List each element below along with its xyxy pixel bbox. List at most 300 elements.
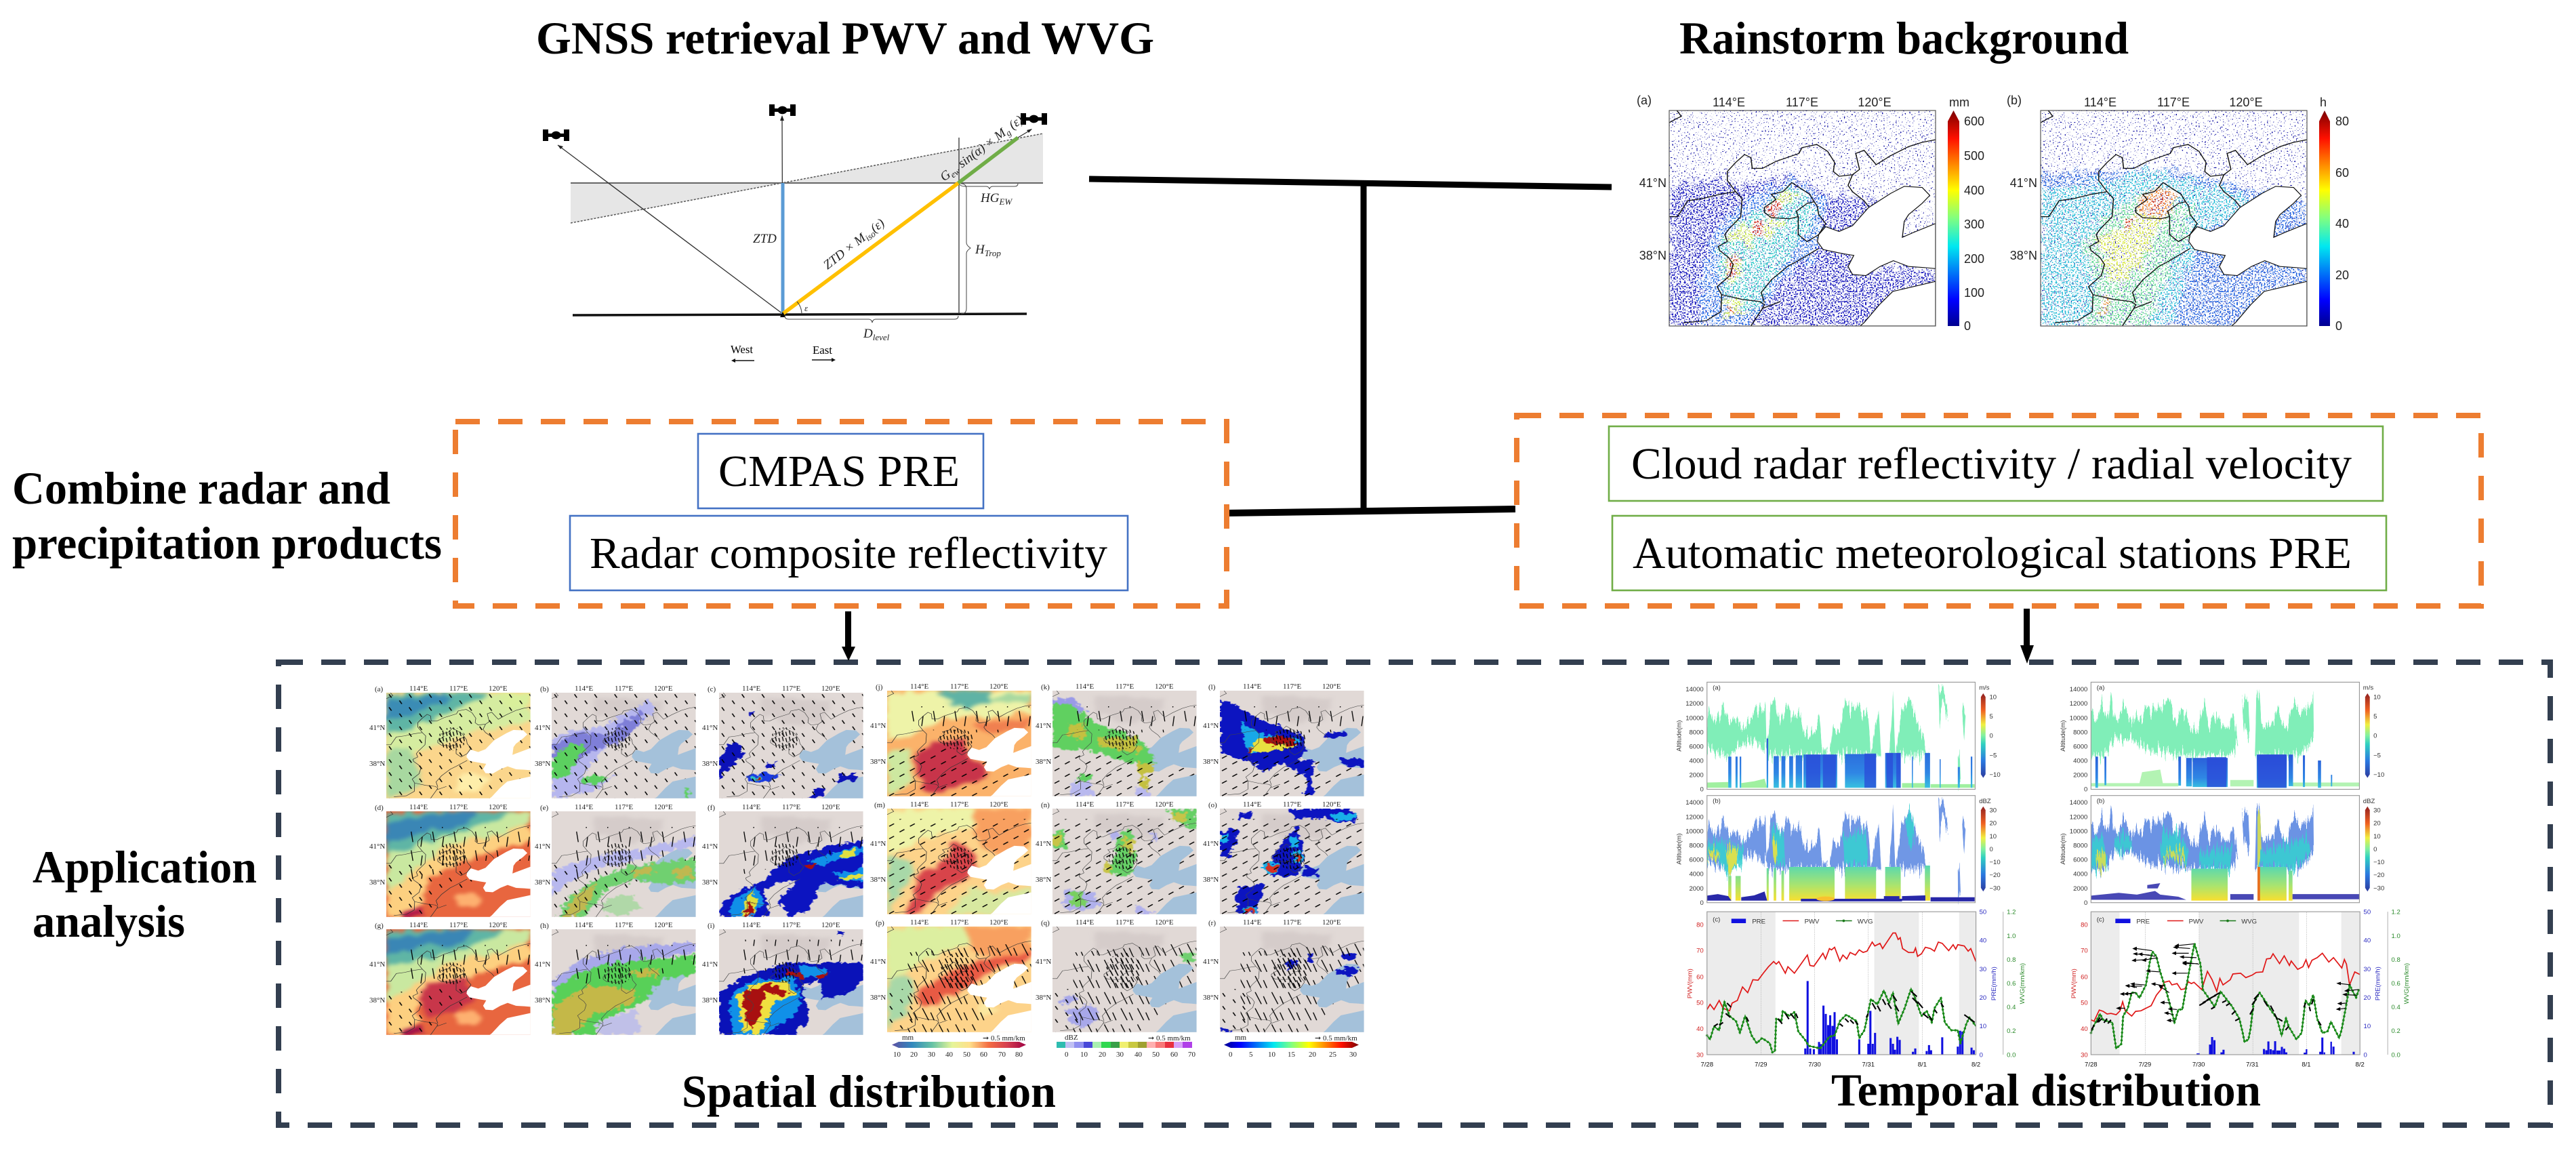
axis labels: 120°E <box>2229 96 2263 109</box>
axes labels: 50 <box>1696 1000 1704 1007</box>
axes labels: 40 <box>1980 937 1986 945</box>
legend: PWV <box>2189 918 2204 925</box>
radial velocity panel a: (a) <box>1713 685 1721 692</box>
panel: cloud radar and station products <box>1517 415 2481 606</box>
axes labels: 30 <box>1980 966 1986 973</box>
axes labels: 0.4 <box>2007 1004 2016 1011</box>
map panel j: 41°N <box>870 722 886 730</box>
map panel n <box>1036 800 1197 914</box>
colorbar: PWV mm <box>892 1034 1026 1059</box>
map panel o <box>1203 800 1364 914</box>
axes labels: 7/31 <box>1862 1061 1875 1069</box>
map panel f: 114°E <box>742 803 760 811</box>
box: CMPAS PRE <box>698 434 983 508</box>
reflectivity panel b: (b) <box>2097 797 2104 805</box>
map panel b: 38°N <box>535 760 550 768</box>
reflectivity panel b: −10 <box>1989 859 2001 866</box>
map panel l: 38°N <box>1203 758 1219 766</box>
axes labels <box>2070 909 2411 1069</box>
reflectivity panel b: 0 <box>2373 846 2377 853</box>
axes labels: 40 <box>1696 1026 1704 1033</box>
axes labels: 1.0 <box>2007 933 2016 940</box>
axes labels: 8/1 <box>1918 1061 1927 1069</box>
map panel k: 120°E <box>1155 683 1174 691</box>
axes labels: 30 <box>1696 1051 1704 1059</box>
colorbar: PWV mm: 20 <box>910 1051 918 1059</box>
reflectivity panel b <box>2060 796 2384 907</box>
radial velocity panel a: m/s <box>2363 685 2373 692</box>
map panel f: 120°E <box>821 803 840 811</box>
formula labels: g <box>1004 127 1013 138</box>
reflectivity panel b: 6000 <box>1690 857 1704 864</box>
reflectivity panel b: 0 <box>1989 846 1993 853</box>
axes labels: 0 <box>2364 1051 2367 1059</box>
reflectivity panel b: −30 <box>2373 885 2384 892</box>
colorbar: PWV mm: ➞ 0.5 mm/km <box>983 1034 1025 1042</box>
colorbar: radar dBZ: 70 <box>1188 1051 1195 1059</box>
map panel q: 38°N <box>1036 994 1051 1002</box>
map panel d: 117°E <box>449 803 468 811</box>
map panel p: 117°E <box>950 918 968 927</box>
formula labels: ZTD × M <box>821 230 869 272</box>
reflectivity panel b: 4000 <box>1690 871 1704 878</box>
reflectivity panel b: 20 <box>1989 820 1997 828</box>
connector: upper horizontal <box>1089 179 1612 187</box>
radial velocity panel a: 8000 <box>1690 729 1704 736</box>
direction labels West and East: West <box>731 343 753 356</box>
map panel b: 114°E <box>575 685 593 693</box>
legend: PRE <box>1752 918 1765 925</box>
map panel c: 114°E <box>742 685 760 693</box>
map panel a <box>369 685 531 798</box>
formula labels: D <box>863 327 873 341</box>
panel: radar and precipitation products <box>455 422 1227 606</box>
radial velocity panel a: 10000 <box>1685 714 1704 722</box>
axes labels: 0.6 <box>2007 980 2016 988</box>
reflectivity panel b: 2000 <box>2073 885 2087 893</box>
axes labels: 20 <box>2364 994 2371 1002</box>
colorbar: PWV mm: 50 <box>963 1051 970 1059</box>
formula labels: ε <box>804 303 809 313</box>
axes labels: PRE(mm/h) <box>1990 967 1998 1000</box>
reflectivity panel b: 12000 <box>2070 814 2087 821</box>
map panel q: 120°E <box>1155 918 1174 927</box>
connector: lower horizontal <box>1227 509 1515 513</box>
reflectivity panel b <box>1675 796 2001 907</box>
gray tropospheric wedges <box>571 134 1043 223</box>
map panel i <box>702 921 863 1035</box>
map panel m: 120°E <box>989 800 1008 809</box>
axes labels: 40 <box>2364 937 2371 945</box>
reflectivity panel b: 10 <box>2373 833 2381 840</box>
axes labels: 0.8 <box>2007 956 2016 964</box>
map panel m: 114°E <box>910 800 928 809</box>
map panel e: (e) <box>540 804 549 812</box>
reflectivity panel b: 10 <box>1989 833 1997 840</box>
radial velocity panel a: 2000 <box>2073 772 2087 779</box>
map panel n: 41°N <box>1036 840 1051 848</box>
box: Automatic meteorological stations PRE <box>1612 516 2386 590</box>
map panel o: 114°E <box>1243 800 1261 809</box>
radial velocity panel a: m/s <box>1979 685 1990 692</box>
map panel o: 41°N <box>1203 840 1219 848</box>
reflectivity panel b: 20 <box>2373 820 2381 828</box>
map panel q: 117°E <box>1116 918 1134 927</box>
arrow: right down <box>2020 609 2034 664</box>
axes labels: 60 <box>2081 973 2088 981</box>
map: rainfall duration (b) <box>2007 94 2349 333</box>
map: accumulated rainfall (a) <box>1637 94 1984 333</box>
legend: WVG <box>1858 918 1873 925</box>
map panel n: 38°N <box>1036 876 1051 884</box>
panel: application analysis outer dashed frame <box>279 662 2550 1125</box>
reflectivity panel b: 8000 <box>1690 843 1704 850</box>
axes labels: PRE(mm/h) <box>2375 967 2382 1000</box>
map panel j: (j) <box>876 683 883 691</box>
radial velocity panel a: Altitude(m) <box>2060 720 2067 752</box>
radial velocity panel a: −5 <box>2373 752 2381 759</box>
axis labels: 114°E <box>2084 96 2117 109</box>
map panel o: 120°E <box>1322 800 1341 809</box>
formula labels: ZTD <box>753 232 777 246</box>
reflectivity panel b: dBZ <box>2363 798 2375 805</box>
connector: vertical trunk <box>1361 183 1366 512</box>
map panel a: 41°N <box>369 724 385 732</box>
reflectivity panel b: 6000 <box>2073 857 2087 864</box>
axis labels: 41°N <box>1639 176 1667 190</box>
radial velocity panel a <box>1675 682 2001 794</box>
colorbar: rain rate: 20 <box>1309 1051 1316 1059</box>
axes labels: 80 <box>1696 921 1704 929</box>
axes labels: 0.6 <box>2392 980 2400 988</box>
PRE PWV WVG panel c <box>1687 909 2026 1069</box>
map panel e: 114°E <box>575 803 593 811</box>
radial velocity panel a: 10000 <box>2070 714 2087 722</box>
map panel l <box>1203 683 1364 796</box>
precipitation bars <box>1804 981 1975 1055</box>
heading: Application analysis <box>33 841 257 947</box>
formula labels: (ε) <box>868 216 887 236</box>
chart group: left cloud radar time series <box>1675 682 2026 1069</box>
axes labels: 70 <box>2081 948 2088 955</box>
legend: PRE <box>2136 918 2150 925</box>
colorbar: radar dBZ: 50 <box>1152 1051 1160 1059</box>
map panel e <box>535 803 696 917</box>
axes labels: 30 <box>2364 966 2371 973</box>
map panel a: 114°E <box>409 685 428 693</box>
map panel l: 117°E <box>1283 683 1301 691</box>
map panel l: 41°N <box>1203 722 1219 730</box>
colorbar: radar dBZ: ➞ 0.5 mm/km <box>1148 1034 1191 1042</box>
axes labels: 7/30 <box>1808 1061 1821 1069</box>
icon: satellite left <box>543 129 569 141</box>
map panel n: 120°E <box>1155 800 1174 809</box>
map panel n: 114°E <box>1076 800 1094 809</box>
map panel p: (p) <box>876 919 884 927</box>
map panel r <box>1203 918 1364 1032</box>
axes labels: 80 <box>2081 921 2088 929</box>
formula labels: ew <box>948 165 962 180</box>
map panel f: 117°E <box>782 803 800 811</box>
map panel h: (h) <box>540 922 549 930</box>
reflectivity panel b: 8000 <box>2073 843 2087 850</box>
map panel m: 38°N <box>870 876 886 884</box>
radial velocity panel a: (a) <box>2097 685 2104 692</box>
colorbar: PWV mm: 80 <box>1015 1051 1023 1059</box>
radial velocity panel a: 6000 <box>2073 743 2087 750</box>
heading: Temporal distribution: Temporal distribution <box>1831 1064 2261 1116</box>
box: Radar composite reflectivity: Radar composite reflectivity <box>590 529 1107 578</box>
axes labels: 0.4 <box>2392 1004 2400 1011</box>
map panel c: 117°E <box>782 685 800 693</box>
map panel b: 117°E <box>615 685 633 693</box>
map panel b: 41°N <box>535 724 550 732</box>
colorbar: PWV mm: 40 <box>945 1051 953 1059</box>
map panel p: 120°E <box>989 918 1008 927</box>
map panel h: 41°N <box>535 960 550 969</box>
map panel j: 114°E <box>910 683 928 691</box>
map panel g: 117°E <box>449 921 468 929</box>
axis labels: 300 <box>1964 218 1984 231</box>
icon: satellite right <box>1021 113 1047 125</box>
map panel r: 117°E <box>1283 918 1301 927</box>
axes labels: 8/1 <box>2302 1061 2311 1069</box>
reflectivity panel b: 14000 <box>2070 799 2087 807</box>
title: Rainstorm background: Rainstorm background <box>1679 12 2129 64</box>
axes labels: 70 <box>1696 948 1704 955</box>
map panel g <box>369 921 531 1035</box>
map panel r: 38°N <box>1203 994 1219 1002</box>
box: Cloud radar reflectivity / radial velocity <box>1609 426 2383 501</box>
PRE PWV WVG panel c <box>2070 909 2411 1069</box>
axis labels <box>1637 94 1984 333</box>
reflectivity panel b: −20 <box>1989 872 2001 879</box>
map panel p: 41°N <box>870 958 886 966</box>
colorbar: rain rate: 30 <box>1349 1051 1357 1059</box>
radial velocity panel a: 14000 <box>1685 686 1704 693</box>
box: Cloud radar reflectivity / radial velocity: Cloud radar reflectivity / radial velocity <box>1631 439 2352 489</box>
map panel d: 41°N <box>369 843 385 851</box>
PWV line <box>1707 933 1976 1011</box>
map panel k: (k) <box>1041 683 1050 691</box>
reflectivity panel b: 10000 <box>1685 828 1704 836</box>
axes labels: 7/29 <box>2139 1061 2151 1069</box>
map panel c: 120°E <box>821 685 840 693</box>
radial velocity panel a: 0 <box>2084 786 2087 794</box>
map panel c: 41°N <box>702 724 718 732</box>
reflectivity panel b: Altitude(m) <box>1675 833 1683 865</box>
legend: (c) <box>2097 916 2104 923</box>
map panel e: 38°N <box>535 878 550 887</box>
axes labels: 1.0 <box>2392 933 2400 940</box>
axis labels: (a) <box>1637 94 1652 107</box>
map panel o: 38°N <box>1203 876 1219 884</box>
reflectivity panel b: −30 <box>1989 885 2001 892</box>
axis labels: 500 <box>1964 149 1984 163</box>
map panel f <box>702 803 863 917</box>
reflectivity panel b: Altitude(m) <box>2060 833 2067 865</box>
colorbar: PWV mm: 10 <box>893 1051 901 1059</box>
axes labels: 8/2 <box>1971 1061 1980 1069</box>
map panel g: 114°E <box>409 921 428 929</box>
axes labels: 1.2 <box>2007 909 2016 916</box>
colorbar: PWV mm: 30 <box>928 1051 935 1059</box>
axes labels: 7/31 <box>2246 1061 2259 1069</box>
map panel j: 38°N <box>870 758 886 766</box>
axis labels: 60 <box>2335 166 2349 180</box>
colorbar: radar dBZ: 0 <box>1065 1051 1069 1059</box>
map panel a: 120°E <box>489 685 508 693</box>
axes labels: 50 <box>2081 1000 2088 1007</box>
reflectivity panel b: −20 <box>2373 872 2384 879</box>
icon: satellite top <box>769 104 796 116</box>
legend <box>2097 916 2257 925</box>
axis labels: mm <box>1949 96 1969 109</box>
axes labels: 0.2 <box>2007 1028 2016 1035</box>
map panel p <box>870 918 1031 1032</box>
map panel d: 38°N <box>369 878 385 887</box>
radial velocity panel a: 4000 <box>2073 757 2087 765</box>
wind arrows on WVG line <box>1714 992 1975 1026</box>
map panel f: 41°N <box>702 843 718 851</box>
colorbar: PWV mm: 60 <box>980 1051 988 1059</box>
map panel r: (r) <box>1208 919 1216 927</box>
direction labels West and East: East <box>813 344 832 357</box>
direction labels West and East <box>731 343 836 363</box>
map panel k: 114°E <box>1076 683 1094 691</box>
axis labels: (b) <box>2007 94 2022 107</box>
ZTD blue line <box>781 183 785 314</box>
box: Radar composite reflectivity <box>570 516 1128 590</box>
axis labels: 100 <box>1964 286 1984 300</box>
axes labels: WVG(mm/km) <box>2019 963 2026 1004</box>
box: Automatic meteorological stations PRE: Automatic meteorological stations PRE <box>1633 529 2352 578</box>
reflectivity panel b: dBZ <box>1979 798 1991 805</box>
PWV line <box>2091 953 2360 1021</box>
map panel n: 117°E <box>1116 800 1134 809</box>
axes labels: 50 <box>2364 909 2371 916</box>
axes labels: 10 <box>1980 1023 1986 1030</box>
colorbar: radar dBZ <box>1057 1034 1195 1059</box>
reflectivity panel b: 4000 <box>2073 871 2087 878</box>
colorbar mm <box>1948 110 1959 326</box>
map panel i: 114°E <box>742 921 760 929</box>
colorbar: rain rate: 5 <box>1249 1051 1253 1059</box>
colorbar: rain rate: 0 <box>1229 1051 1233 1059</box>
colorbar: rain rate <box>1224 1034 1359 1059</box>
radial velocity panel a: 0 <box>1700 786 1704 794</box>
colorbar: radar dBZ: dBZ <box>1065 1034 1078 1042</box>
radial velocity panel a: 0 <box>2373 733 2377 740</box>
formula labels: level <box>873 332 890 342</box>
map panel q: 41°N <box>1036 958 1051 966</box>
reflectivity panel b: 30 <box>2373 807 2381 815</box>
axes labels: 60 <box>1696 973 1704 981</box>
heading: Application analysis: Application <box>33 841 257 893</box>
axis labels: 38°N <box>1639 249 1667 262</box>
radial velocity panel a: 12000 <box>1685 700 1704 708</box>
axes labels: 0.2 <box>2392 1028 2400 1035</box>
axis labels: 20 <box>2335 268 2349 282</box>
axis labels: 400 <box>1964 184 1984 197</box>
mapped delay gold line <box>783 183 958 314</box>
map panel h: 38°N <box>535 996 550 1004</box>
axes labels: 10 <box>2364 1023 2371 1030</box>
map panel a: (a) <box>375 685 384 693</box>
colorbar: rain rate: 25 <box>1329 1051 1336 1059</box>
heading: Application analysis: analysis <box>33 895 185 947</box>
axis labels: 117°E <box>1786 96 1818 109</box>
reflectivity panel b: −10 <box>2373 859 2384 866</box>
map panel j: 120°E <box>989 683 1008 691</box>
heading: Combine radar and precipitation products: Combine radar and <box>12 462 390 514</box>
axis labels: h <box>2320 96 2327 109</box>
axis labels: 80 <box>2335 115 2349 128</box>
axes labels: 0.0 <box>2007 1051 2016 1059</box>
map panel r: 114°E <box>1243 918 1261 927</box>
radial velocity panel a: 0 <box>1989 733 1993 740</box>
axes labels: 0.0 <box>2392 1051 2400 1059</box>
map panel b: 120°E <box>654 685 673 693</box>
map panel k <box>1036 683 1197 796</box>
map panel o: (o) <box>1208 801 1217 809</box>
formula labels: (ε) <box>1004 113 1026 134</box>
wind arrows on WVG line <box>2117 944 2358 1021</box>
axis labels: 120°E <box>1858 96 1892 109</box>
axis labels <box>2007 94 2349 333</box>
colorbar: rain rate: 10 <box>1268 1051 1275 1059</box>
map panel q: 114°E <box>1076 918 1094 927</box>
reflectivity panel b: 0 <box>2084 899 2087 907</box>
map panel m: 117°E <box>950 800 968 809</box>
axes labels <box>1687 909 2026 1069</box>
axis labels: 117°E <box>2157 96 2190 109</box>
radial velocity panel a: −5 <box>1989 752 1997 759</box>
axes labels: 7/28 <box>1700 1061 1713 1069</box>
arrow: left down <box>842 611 855 661</box>
map panel h <box>535 921 696 1035</box>
map panel d <box>369 803 531 917</box>
map panel b: (b) <box>540 685 549 693</box>
reflectivity panel b: 12000 <box>1685 814 1704 821</box>
colorbar: radar dBZ: 60 <box>1170 1051 1178 1059</box>
axis labels: 0 <box>2335 319 2342 333</box>
map panel i: 120°E <box>821 921 840 929</box>
WVG line <box>1707 989 1976 1053</box>
axes labels: 0.8 <box>2392 956 2400 964</box>
legend <box>1713 916 1873 925</box>
axis labels: 41°N <box>2010 176 2037 190</box>
axes labels: 7/29 <box>1755 1061 1767 1069</box>
map panel a: 117°E <box>449 685 468 693</box>
map panel g: (g) <box>375 922 384 930</box>
reflectivity panel b: 2000 <box>1690 885 1704 893</box>
map panel f: 38°N <box>702 878 718 887</box>
formula labels: H <box>975 243 985 257</box>
radial velocity panel a: 5 <box>1989 713 1993 720</box>
reflectivity panel b: (b) <box>1713 797 1721 805</box>
colorbar: radar dBZ: 40 <box>1134 1051 1143 1059</box>
map panel i: 117°E <box>782 921 800 929</box>
radial velocity panel a: 8000 <box>2073 729 2087 736</box>
map panel q <box>1036 918 1197 1032</box>
legend: PWV <box>1805 918 1820 925</box>
colorbar: PWV mm: mm <box>902 1034 914 1042</box>
map panel b <box>535 685 696 798</box>
map panel i: 38°N <box>702 996 718 1004</box>
map panel d: 114°E <box>409 803 428 811</box>
colorbar: rain rate: mm <box>1235 1034 1247 1042</box>
